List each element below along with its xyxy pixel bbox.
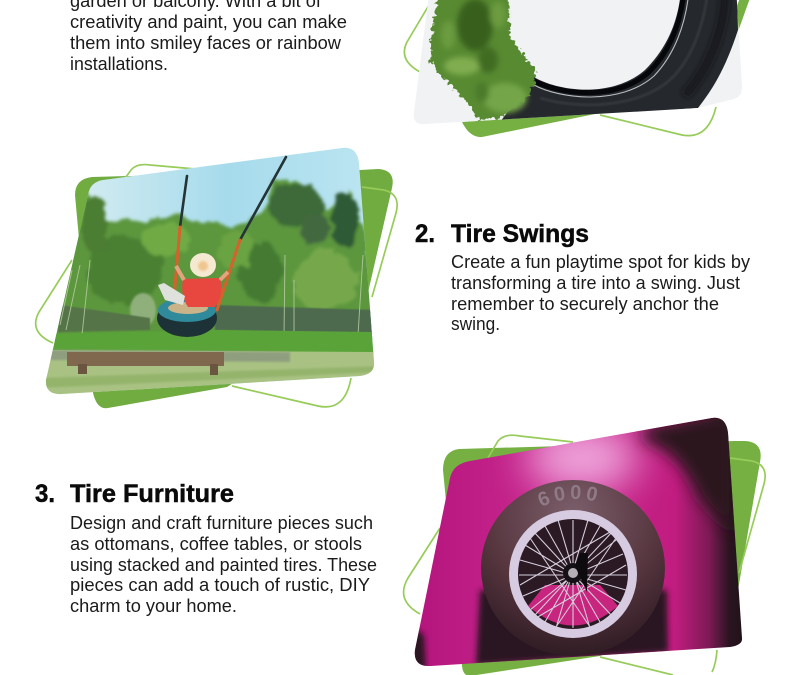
green backing shape 1	[462, 0, 750, 137]
heading: item 3: 3.	[35, 480, 55, 508]
text block: item 2 description: transforming a tire into a swing. Just	[451, 273, 740, 293]
text block: item 3 description: charm to your home.	[70, 596, 237, 616]
panel: tire furniture image	[402, 418, 766, 675]
wheel	[481, 480, 665, 656]
bamboo stems	[60, 255, 363, 336]
text block: item 3 description: pieces can add a touch of rustic, DIY	[70, 575, 370, 595]
panel: tire planter image	[400, 0, 760, 140]
green outline 2	[36, 165, 397, 407]
green outline 1	[404, 0, 716, 136]
wheel: 6000	[538, 485, 597, 506]
greenery	[430, 0, 536, 120]
text block: item 2 description: Create a fun playtime spot for kids by	[451, 252, 750, 272]
green backing shape 3	[443, 441, 761, 675]
grass	[40, 330, 380, 356]
text block: item 3 description: Design and craft furniture pieces such	[70, 513, 373, 533]
panel: tire swing image	[30, 140, 397, 408]
text block: item 3 description	[70, 513, 377, 616]
child on tire	[157, 253, 228, 337]
green outline 3	[404, 435, 765, 675]
text block: item 1 description	[70, 0, 347, 74]
green backing shape 2	[75, 169, 393, 408]
heading: item 2: Tire Swings	[451, 220, 589, 248]
fence	[58, 305, 375, 333]
text block: item 3 description: as ottomans, coffee tables, or stools	[70, 534, 362, 554]
text block: item 1 description: installations.	[70, 54, 168, 74]
text block: item 1 description: them into smiley faces or rainbow	[70, 33, 342, 53]
swing chains and ropes	[173, 157, 286, 310]
tire	[500, 0, 738, 122]
photo: child on tire swing	[46, 148, 374, 394]
heading: item 3: Tire Furniture	[70, 480, 234, 508]
treeline	[30, 178, 385, 345]
text block: item 3 description: using stacked and painted tires. These	[70, 555, 377, 575]
photo: tire with greenery	[414, 0, 742, 124]
text block: item 2 description: swing.	[451, 314, 500, 334]
tire shadow	[476, 590, 668, 665]
heading: item 2: 2.	[415, 220, 435, 248]
text block: item 1 description: creativity and paint, you can make	[70, 12, 347, 32]
text block: item 2 description: remember to securely anchor the	[451, 294, 719, 314]
bench	[67, 352, 224, 375]
text block: item 2 description	[451, 252, 750, 334]
photo: wire wheel on magenta	[414, 418, 742, 666]
